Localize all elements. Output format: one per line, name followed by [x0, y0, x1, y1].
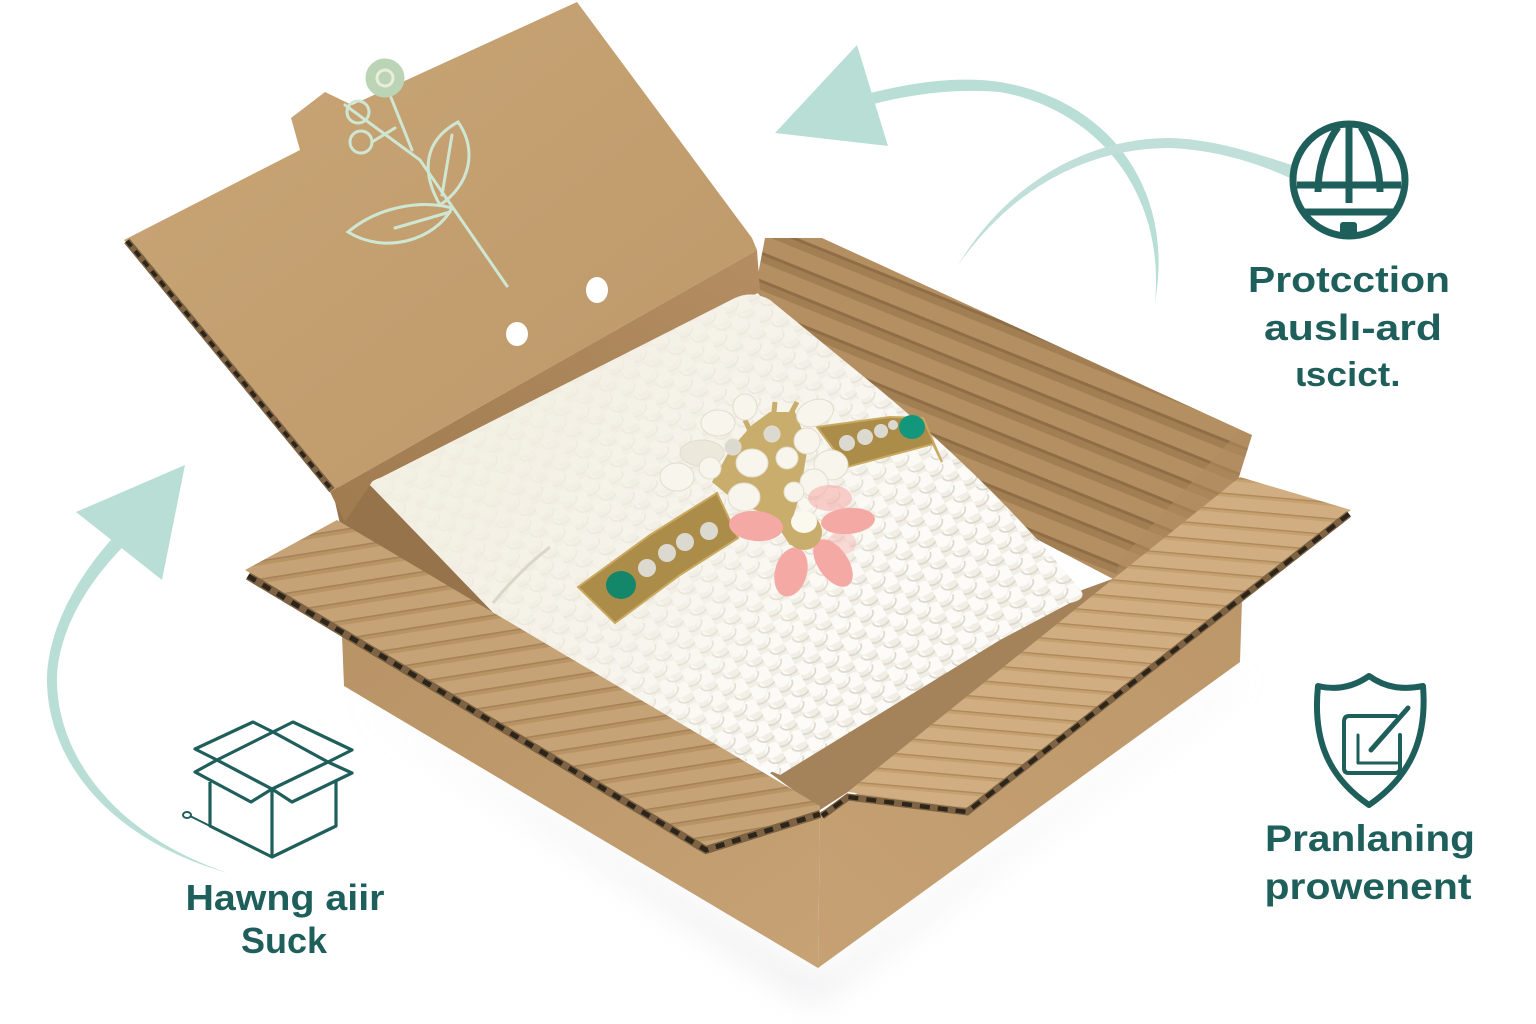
lid punch holes	[506, 322, 528, 346]
label: protection text: Protcction	[1248, 259, 1450, 300]
callout: protection: auslı-ard	[1264, 307, 1442, 348]
open lid	[124, 2, 760, 522]
icon: open box	[183, 722, 352, 857]
callout: planning	[1264, 676, 1475, 907]
right corrugated flap	[822, 477, 1351, 816]
box interior back wall	[755, 238, 1252, 580]
lid corrugated edge	[127, 241, 332, 490]
jewelry band left	[578, 493, 738, 623]
jewelry brooch	[578, 394, 942, 623]
arrow: curve from protection icon	[958, 138, 1292, 265]
icon: plant sprig on lid	[345, 60, 507, 286]
label: planning text: Pranlaning	[1265, 818, 1475, 859]
callout: air: Suck	[241, 920, 328, 961]
gold cluster	[712, 412, 815, 545]
callout: protection: ɩscict.	[1296, 356, 1400, 394]
label: air text: Hawng aiir	[186, 877, 384, 918]
callout: air	[183, 722, 384, 961]
box interior floor	[770, 578, 1115, 810]
outer right wall	[818, 600, 1242, 968]
pillow soft upper shading	[370, 294, 1082, 775]
arrow: top curved arrow to lid	[775, 45, 1159, 302]
left corrugated flap	[245, 520, 820, 850]
icon: globe dome	[1293, 124, 1405, 236]
icon: shield with document	[1317, 676, 1424, 805]
jewelry band right	[817, 417, 942, 467]
callout: protection	[1248, 124, 1450, 394]
outer left wall	[342, 635, 820, 968]
cardboard box with lid	[124, 2, 1351, 968]
inner wedge under lid	[332, 482, 510, 630]
box shadow	[345, 672, 1250, 1000]
callout: planning: prowenent	[1264, 866, 1472, 907]
arrow: lower left curved arrow	[47, 465, 228, 873]
pillow	[370, 294, 1082, 775]
